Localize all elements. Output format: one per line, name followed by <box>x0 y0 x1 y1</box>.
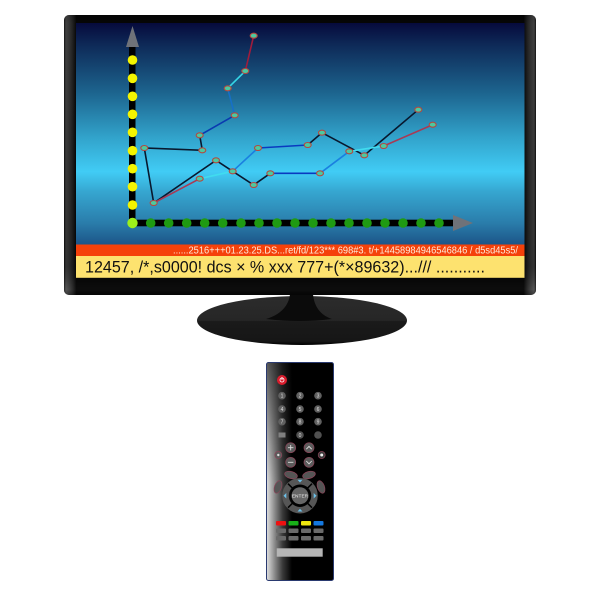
yellow ticker band: 12457, /*,s0000! dcs × % xxx 777+(*×89632).../// ........... <box>85 258 485 276</box>
stand neck <box>266 294 332 321</box>
remote control <box>266 362 334 580</box>
number keys <box>278 392 322 439</box>
power button <box>277 375 287 385</box>
number keys: 4 <box>281 407 284 413</box>
d-pad with enter: ENTER <box>292 493 309 499</box>
orange ticker band: ......2516+++01.23.25.DS...ret/fd/123*** 698#3. t/+14458984946546846 / d5sd45s5/ <box>173 246 518 256</box>
number keys: 5 <box>299 407 302 413</box>
volume and channel keys <box>272 443 327 494</box>
chart points <box>141 33 436 206</box>
number keys: 1 <box>281 394 284 400</box>
remote body <box>266 362 334 580</box>
chart <box>126 26 473 231</box>
d-pad with enter <box>284 480 316 512</box>
label plate <box>277 548 323 557</box>
number keys: 8 <box>299 420 302 426</box>
number keys: 6 <box>317 407 320 413</box>
vertical axis <box>126 26 139 223</box>
tv bezel <box>64 15 536 295</box>
number keys: 0 <box>299 433 302 439</box>
tv screen <box>76 23 524 245</box>
number keys: 9 <box>317 420 320 426</box>
number keys: 3 <box>317 394 320 400</box>
key symbols <box>277 445 323 464</box>
orange ticker band <box>76 244 524 256</box>
grey keys <box>276 528 324 540</box>
colour keys <box>276 521 324 526</box>
chart lines <box>144 36 433 203</box>
number keys: 2 <box>299 394 302 400</box>
number keys: 7 <box>281 420 284 426</box>
tv stand <box>197 294 407 345</box>
horizontal axis <box>127 215 473 231</box>
stand base <box>197 296 407 345</box>
